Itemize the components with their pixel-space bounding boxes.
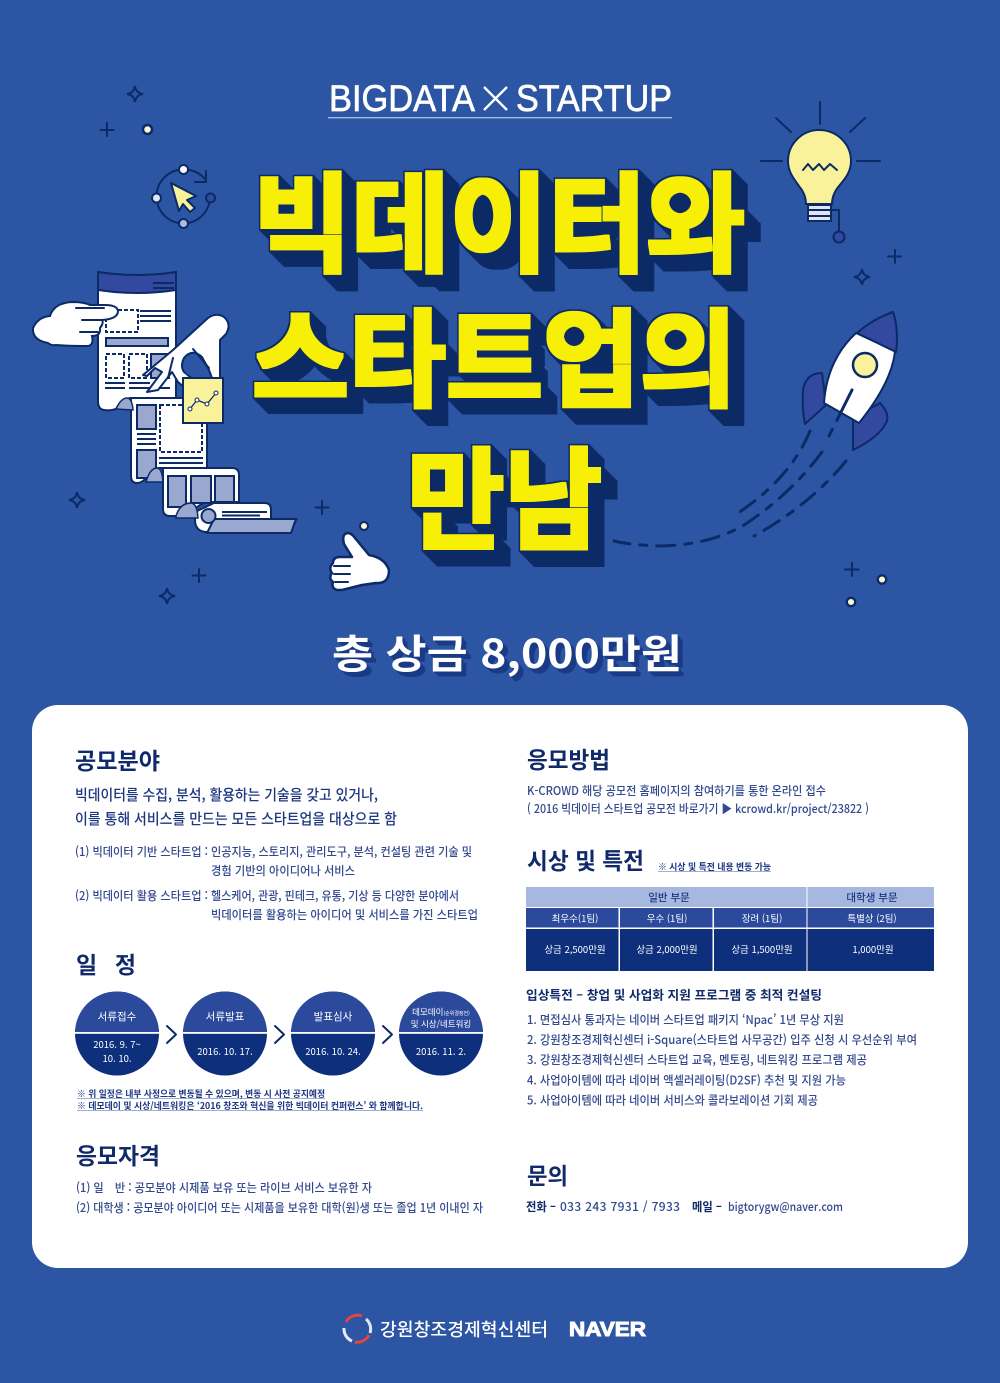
section: 응모자격 — [76, 1137, 483, 1216]
icon: plus right — [888, 250, 901, 263]
icon: plus top left — [100, 123, 114, 136]
icon: cursor cycle — [152, 165, 215, 228]
section: 공모분야: (2) 빅데이터 활용 스타트업 : — [75, 887, 208, 904]
illustration: scrolling documents with hands — [33, 272, 296, 533]
icon: sparkle left — [69, 492, 85, 508]
section: 문의: 메일 – — [692, 1198, 722, 1215]
timeline step: 데모데이 — [399, 992, 483, 1076]
heading: 응모방법: 응모방법 — [527, 741, 610, 775]
schedule notes: ※ 데모데이 및 시상/네트워킹은 ‘2016 창조와 혁신을 위한 빅데이터 컨퍼런스’ 와 함께합니다. — [77, 1099, 423, 1112]
heading: 시상 및 특전: 시상 및 특전 — [527, 842, 644, 876]
section: 공모분야: (1) 빅데이터 기반 스타트업 : — [75, 843, 208, 860]
hand holding card — [143, 315, 229, 392]
benefits list: 2. 강원창조경제혁신센터 i-Square(스타트업 사무공간) 입주 신청 시 우선순위 부여 — [527, 1031, 917, 1048]
section: 공모분야: 헬스케어, 관광, 핀테크, 유통, 기상 등 다양한 분야에서 — [211, 887, 459, 904]
footer logos — [344, 1315, 647, 1342]
section: 응모방법: ( 2016 빅데이터 스타트업 공모전 바로가기 ▶ kcrowd.kr/project/23822 ) — [527, 800, 869, 817]
section: 문의 — [526, 1157, 843, 1215]
schedule notes: ※ 위 일정은 내부 사정으로 변동될 수 있으며, 변동 시 사전 공지예정 — [77, 1087, 325, 1100]
icon: rocket — [803, 312, 897, 450]
icon: Gangwon center logo ring — [344, 1315, 371, 1342]
sheet four — [195, 503, 296, 532]
yellow chart card — [183, 378, 223, 423]
timeline step: 서류접수: 서류접수 — [98, 1009, 137, 1024]
schedule notes — [77, 1087, 423, 1112]
section: 문의: 전화 – — [526, 1198, 556, 1215]
prize table: 최우수(1팀) — [552, 911, 598, 925]
panel: contest details — [32, 705, 968, 1268]
icon: sparkle lower left — [159, 588, 175, 604]
prize table: 상금 2,000만원 — [636, 942, 698, 956]
section: 문의: 033 243 7931 / 7933 — [560, 1198, 680, 1215]
section: 공모분야: 이를 통해 서비스를 만드는 모든 스타트업을 대상으로 함 — [75, 808, 397, 829]
benefits list: 3. 강원창조경제혁신센터 스타트업 교육, 멘토링, 네트워킹 프로그램 제공 — [527, 1051, 867, 1068]
timeline step: 서류접수: 10. 10. — [102, 1051, 132, 1065]
icon: rocket dashed trails — [614, 431, 846, 546]
heading: 응모자격: 응모자격 — [76, 1137, 160, 1171]
section: 시상 및 특전 — [526, 842, 934, 1108]
heading: 공모분야: 공모분야 — [75, 742, 160, 776]
timeline step: 발표심사: 2016. 10. 24. — [305, 1044, 361, 1058]
section: 공모분야: 경험 기반의 아이디어나 서비스 — [211, 862, 355, 879]
footer logos: 강원창조경제혁신센터 — [380, 1316, 548, 1342]
sheet three — [163, 468, 239, 516]
arrow — [275, 1026, 284, 1043]
section: 공모분야: 빅데이터를 수집, 분석, 활용하는 기술을 갖고 있거나, — [75, 784, 378, 805]
benefits list: 1. 면접심사 통과자는 네이버 스타트업 패키지 ‘Npac’ 1년 무상 지원 — [527, 1011, 844, 1028]
icon: dot top left — [143, 125, 152, 134]
timeline step: 서류접수 — [75, 992, 159, 1076]
section: 응모방법: K-CROWD 해당 공모전 홈페이지의 참여하기를 통한 온라인 접수 — [527, 782, 826, 799]
timeline step: 서류접수: 2016. 9. 7~ — [93, 1037, 141, 1051]
eyebrow title: BIGDATA x STARTUP — [328, 78, 672, 119]
icon: thumbs up hand — [330, 533, 389, 590]
prize table: 장려 (1팀) — [742, 911, 782, 925]
timeline step: 데모데이: 데모데이(순위결정전) — [412, 1006, 470, 1018]
arrow — [383, 1026, 392, 1043]
total prize heading: 총 상금 8,000만원 — [332, 622, 682, 680]
prize table: 우수 (1팀) — [647, 911, 687, 925]
icon: sparkle top left — [127, 86, 143, 102]
benefits list: 5. 사업아이템에 따라 네이버 서비스와 콜라보레이션 기회 제공 — [527, 1092, 818, 1108]
main title: 만남 — [407, 412, 602, 572]
icon: plus center left — [316, 501, 328, 514]
icon: dot lower right a — [878, 575, 886, 584]
section: 문의: bigtorygw@naver.com — [728, 1198, 843, 1215]
section: 공모분야 — [75, 742, 478, 923]
prize table: 상금 2,500만원 — [544, 942, 606, 956]
section: 응모자격: (1) 일 반 : 공모분야 시제품 보유 또는 라이브 서비스 보유한 자 — [76, 1179, 372, 1196]
prize table: 1,000만원 — [852, 942, 894, 956]
timeline step: 발표심사: 발표심사 — [314, 1009, 353, 1024]
icon: plus lower left — [192, 569, 206, 582]
icon: plus lower right — [845, 563, 858, 576]
icon: light bulb — [761, 102, 880, 242]
arrow — [167, 1026, 176, 1043]
eyebrow title: BIGDATA x STARTUP: BIGDATA — [329, 78, 475, 119]
icon: sparkle right — [854, 269, 870, 285]
timeline step: 데모데이: 2016. 11. 2. — [416, 1044, 466, 1058]
section: 일정 — [75, 946, 483, 1112]
heading: 문의: 문의 — [527, 1157, 568, 1191]
sheet one — [98, 272, 176, 410]
prize table: 대학생 부문 — [846, 890, 898, 905]
icon: dot lower right b — [847, 598, 855, 606]
prize table — [526, 887, 934, 971]
benefits list — [526, 984, 917, 1108]
benefits list: 4. 사업아이템에 따라 네이버 액셀러레이팅(D2SF) 추천 및 지원 가능 — [527, 1072, 846, 1088]
main title: 스타트업의 — [252, 275, 737, 429]
prize table: 일반 부문 — [648, 890, 690, 905]
prize table: 특별상 (2팀) — [847, 911, 897, 925]
section: 응모자격: (2) 대학생 : 공모분야 아이디어 또는 시제품을 보유한 대학(원)생 또는 졸업 1년 이내인 자 — [76, 1199, 483, 1216]
timeline step: 서류발표: 2016. 10. 17. — [197, 1044, 253, 1058]
benefits list: 입상특전 – 창업 및 사업화 지원 프로그램 중 최적 컨설팅 — [526, 984, 822, 1004]
footer logos: NAVER — [569, 1319, 647, 1341]
main title — [252, 139, 745, 572]
prize note: ※ 시상 및 특전 내용 변동 가능 — [658, 860, 771, 873]
timeline step: 서류발표 — [183, 992, 267, 1076]
sheet two — [131, 398, 207, 483]
timeline step: 서류발표: 서류발표 — [206, 1009, 245, 1024]
main title: 빅데이터와 — [253, 139, 745, 295]
eyebrow title: BIGDATA x STARTUP: STARTUP — [516, 78, 672, 119]
prize table: 상금 1,500만원 — [731, 942, 793, 956]
timeline step: 데모데이: 및 시상/네트워킹 — [411, 1018, 471, 1030]
icon: dot by thumb — [360, 522, 368, 530]
section: 공모분야: 빅데이터를 활용하는 아이디어 및 서비스를 가진 스타트업 — [211, 906, 478, 923]
timeline step: 발표심사 — [291, 992, 375, 1076]
hand pointing — [33, 302, 118, 346]
section: 응모방법 — [527, 741, 869, 817]
section: 공모분야: 인공지능, 스토리지, 관리도구, 분석, 컨설팅 관련 기술 및 — [211, 843, 472, 860]
heading: 일정: 일 정 — [76, 946, 136, 980]
